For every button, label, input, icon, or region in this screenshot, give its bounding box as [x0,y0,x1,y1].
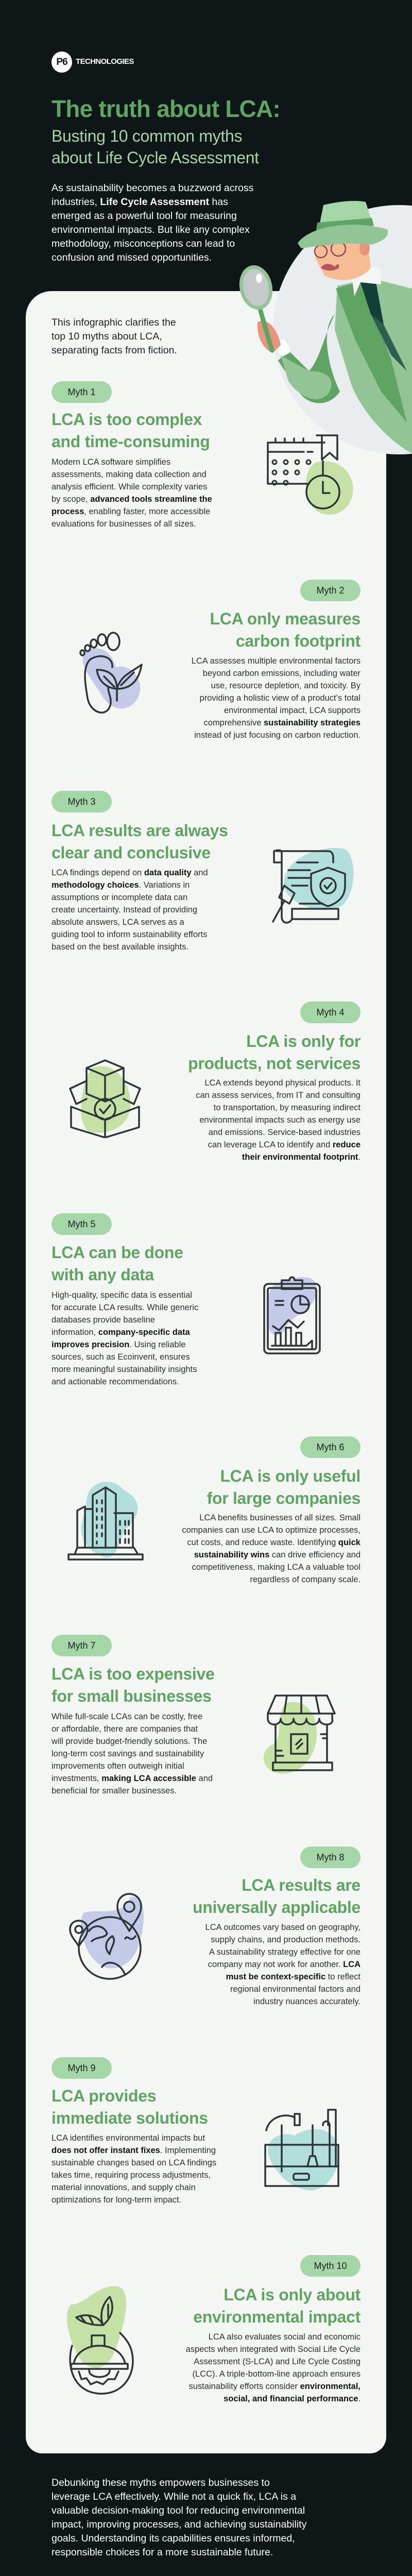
body: myth 2: environmental impact, LCA supports [224,706,360,715]
heading: myth 8: universally applicable [193,1898,360,1917]
pill: myth 2: Myth 2 [316,585,345,596]
icon: box with check [69,1059,141,1138]
body: myth 2: beyond carbon emissions, including water [203,669,360,678]
body: myth 10 [186,2331,360,2405]
heading: myth 9: LCA provides [52,2087,156,2105]
icon: document with shield and gavel [272,848,353,924]
intro text in panel: separating facts from fiction. [52,345,177,356]
body: myth 3 [52,868,208,952]
body: myth 1: by scope, advanced tools streamline the [52,495,212,504]
body: myth 7 [52,1712,213,1795]
intro text in panel [52,317,177,356]
heading: myth 1: LCA is too complex [52,410,202,429]
body: myth 1: assessments, making data collection and [52,470,207,479]
body: myth 8: supply chains, and production methods. [211,1935,360,1944]
body: myth 10: (LCC). A triple-bottom-line approach ensures [193,2369,360,2379]
icon: shop storefront [264,1694,336,1774]
icon: clipboard with charts [263,1276,321,1354]
pill: myth 10 [300,2255,360,2277]
body: myth 2: LCA assesses multiple environmental factors [192,656,360,666]
heading: myth 2: LCA only measures [210,609,360,628]
body: myth 1: Modern LCA software simplifies [52,457,170,467]
body: myth 1: analysis efficient. While complexity varies [52,482,207,492]
myth 2 [192,580,360,740]
pill: myth 4 [300,1002,360,1023]
logo: P6 Technologies header [52,52,134,73]
body: myth 10: social, and financial performance. [224,2394,360,2403]
closing paragraph: Debunking these myths empowers businesses to [52,2477,270,2488]
pill: myth 9 [52,2057,112,2079]
body: myth 3: LCA findings depend on data quality and [52,868,208,877]
myth 9 [52,2057,216,2205]
logo: P6 Technologies header: TECHNOLOGIES [76,57,134,66]
illustration: detective with magnifying glass [239,201,412,454]
icon: footprint with leaf [79,632,143,714]
myth 4 [188,1002,360,1162]
body: myth 9: does not offer instant fixes. Implementing [52,2146,216,2155]
intro text in panel: top 10 myths about LCA, [52,331,162,342]
heading: myth 7 [52,1665,214,1705]
body: myth 1 [52,457,212,529]
panel: myths content [26,291,386,2453]
body: myth 6: competitiveness, making LCA a valuable tool [192,1563,360,1572]
heading: myth 5: LCA can be done [52,1243,183,1262]
heading: myth 3: clear and conclusive [52,843,211,862]
intro paragraph: environmental impacts. But like any complex [52,224,250,235]
heading: myth 1 [52,410,210,451]
body: myth 8: company may not work for another. LCA [208,1960,360,1969]
body: myth 8: industry nuances accurately. [253,1997,360,2006]
body: myth 2: comprehensive sustainability strategies [204,718,360,727]
pill: myth 10: Myth 10 [314,2261,347,2271]
body: myth 3: guiding tool to inform sustainability efforts [52,930,207,939]
body: myth 8: LCA outcomes vary based on geography, [205,1923,360,1932]
pill: myth 8: Myth 8 [316,1852,345,1862]
body: myth 6: LCA benefits businesses of all sizes. Small [199,1513,360,1522]
heading: myth 6: LCA is only useful [220,1467,360,1485]
heading: myth 9: immediate solutions [52,2109,208,2127]
heading: myth 2: carbon footprint [236,632,360,650]
body: myth 9: takes time, requiring process adjustments, [52,2171,211,2180]
body: myth 8 [205,1923,360,2006]
icon: leaves with gear and hard hat [61,2284,138,2397]
heading: myth 7: LCA is too expensive [52,1665,214,1683]
body: myth 7: long-term cost savings and sustainability [52,1749,204,1758]
myth 5 [52,1213,198,1386]
heading: myth 9 [52,2087,208,2127]
pill: myth 7: Myth 7 [67,1640,96,1651]
pill: myth 7 [52,1635,112,1656]
closing paragraph: leverage LCA effectively. While not a quick fix, LCA is a [52,2491,296,2502]
body: myth 7: investments, making LCA accessible and [52,1774,213,1783]
body: myth 6: companies can use LCA to optimize processes, [182,1526,360,1535]
pill: myth 6: Myth 6 [316,1442,345,1452]
body: myth 3: methodology choices. Variations in [52,880,190,890]
heading: myth 4 [188,1032,360,1073]
intro paragraph: methodology, misconceptions can lead to [52,238,235,249]
body: myth 10: LCA also evaluates social and economic [209,2332,360,2342]
heading: myth 3 [52,821,228,862]
body: myth 7: beneficial for smaller businesses. [52,1786,177,1795]
logo: P6 Technologies header: P6 [56,57,67,67]
pill: myth 1: Myth 1 [67,387,96,397]
intro paragraph [52,182,253,263]
body: myth 6 [182,1513,360,1584]
body: myth 6: sustainability wins can drive efficiency and [194,1550,360,1560]
body: myth 4: can assess services, from IT and consulting [196,1091,360,1100]
myth 8 [193,1846,360,2006]
body: myth 8: A sustainability strategy effective for one [209,1947,360,1957]
body: myth 5: and actionable recommendations. [52,1377,179,1386]
myth 3 [52,791,228,952]
heading: myth 6 [207,1467,360,1507]
body: myth 3: based on the best available insights. [52,942,188,952]
body: myth 5: databases provide baseline [52,1315,155,1325]
body: myth 7: or affordable, there are companies that [52,1724,198,1734]
pill: myth 9: Myth 9 [67,2063,96,2073]
heading: myth 6: for large companies [207,1489,360,1507]
pill: myth 5 [52,1213,112,1235]
body: myth 10: aspects when integrated with Social Life Cycle [186,2345,360,2354]
body: myth 2 [192,656,360,740]
body: myth 4: environmental impacts such as energy use [199,1115,360,1125]
body: myth 3: create uncertainty. Instead of providing [52,905,197,914]
body: myth 8: must be context-specific to reflect [226,1972,360,1981]
pill: myth 8 [300,1846,360,1868]
heading: myth 4: products, not services [188,1054,360,1073]
closing paragraph: valuable decision-making tool for reducing environmental [52,2505,305,2516]
heading: myth 8: LCA results are [242,1876,360,1894]
body: myth 9: LCA identifies environmental impacts but [52,2133,205,2143]
body: myth 2: use, resource depletion, and toxicity. By [211,681,360,690]
heading: myth 3: LCA results are always [52,821,228,840]
subtitle: about Life Cycle Assessment [52,148,259,167]
heading: myth 7: for small businesses [52,1687,212,1705]
body: myth 3: absolute answers, LCA serves as a [52,918,184,927]
icon: calendar with clock [267,434,353,515]
closing paragraph [52,2476,306,2560]
body: myth 4: to transportation, by measuring indirect [214,1103,360,1112]
closing paragraph: goals. Understanding its capabilities ensures informed, [52,2533,295,2544]
icon: office buildings [67,1482,144,1561]
closing paragraph: responsible choices for a more sustainable future. [52,2547,273,2558]
myth 10 [52,2255,360,2410]
body: myth 7: improvements often outweigh initial [52,1761,184,1771]
pill: myth 1 [52,381,112,403]
subtitle [52,127,259,167]
intro paragraph: confusion and missed opportunities. [52,252,212,263]
body: myth 5: High-quality, specific data is essential [52,1291,192,1300]
closing paragraph: impact, improving processes, and achieving sustainability [52,2519,306,2530]
body: myth 10: Assessment (S-LCA) and Life Cycle Costing [194,2357,360,2366]
heading: myth 10: environmental impact [193,2308,360,2326]
pill: myth 5: Myth 5 [67,1219,96,1229]
body: myth 4: their environmental footprint. [242,1153,360,1162]
body: myth 1: evaluations for businesses of all sizes. [52,519,196,529]
body: myth 4 [196,1078,360,1162]
body: myth 5: for accurate LCA results. While generic [52,1303,198,1312]
intro paragraph: emerged as a powerful tool for measuring [52,210,237,222]
body: myth 9 [52,2133,216,2205]
pill: myth 2 [300,580,360,601]
body: myth 4: and emissions. Service-based industries [209,1128,360,1137]
pill: myth 3 [52,791,112,812]
body: myth 4: can leverage LCA to identify and reduce [208,1140,360,1149]
body: myth 9: material innovations, and supply chain [52,2183,196,2192]
body: myth 5: more meaningful sustainability insights [52,1365,197,1374]
heading: myth 1: and time-consuming [52,432,210,451]
icon: globe with location pins [69,1893,144,1980]
myth 7 [52,1635,214,1795]
body: myth 6: cut costs, and reduce waste. Identifying quick [187,1538,360,1547]
body: myth 9: sustainable changes based on LCA findings [52,2158,216,2167]
myth 1 [52,381,212,529]
heading: myth 10 [193,2284,360,2328]
icon: toolbox [264,2105,341,2192]
heading: myth 8 [193,1876,360,1917]
body: myth 8: regional environmental factors and [230,1985,360,1994]
body: myth 5 [52,1291,198,1386]
intro text in panel: This infographic clarifies the [52,317,176,328]
intro paragraph: industries, Life Cycle Assessment has [52,196,228,208]
intro paragraph: As sustainability becomes a buzzword across [52,182,253,194]
body: myth 5: sources, such as Ecoinvent, ensures [52,1352,190,1362]
pill: myth 4: Myth 4 [316,1007,345,1018]
subtitle: Busting 10 common myths [52,127,242,145]
body: myth 4: LCA extends beyond physical products. It [204,1078,360,1088]
myth 6 [182,1436,360,1584]
title: The truth about LCA: [52,95,280,122]
body: myth 7: While full-scale LCAs can be costly, free [52,1712,202,1721]
body: myth 1: process, enabling faster, more accessible [52,507,210,516]
pill: myth 3: Myth 3 [67,796,96,807]
pill: myth 6 [300,1436,360,1458]
heading: myth 2 [210,609,360,650]
body: myth 9: optimizations for long-term impact. [52,2195,181,2205]
heading: myth 4: LCA is only for [246,1032,360,1050]
heading: myth 5: with any data [52,1265,154,1284]
body: myth 10: sustainability efforts consider environmental, [188,2382,360,2391]
body: myth 3: assumptions or incomplete data can [52,893,187,902]
heading: myth 10: LCA is only about [224,2285,360,2304]
heading: myth 5 [52,1243,183,1284]
body: myth 7: will provide budget-friendly solutions. The [52,1737,207,1746]
body: myth 2: instead of just focusing on carbon reduction. [194,731,360,740]
body: myth 6: regardless of company scale. [250,1575,360,1584]
body: myth 2: providing a holistic view of a product’s total [200,693,360,703]
body: myth 5: information, company-specific data [52,1328,190,1337]
body: myth 5: improves precision. Using reliable [52,1340,185,1349]
